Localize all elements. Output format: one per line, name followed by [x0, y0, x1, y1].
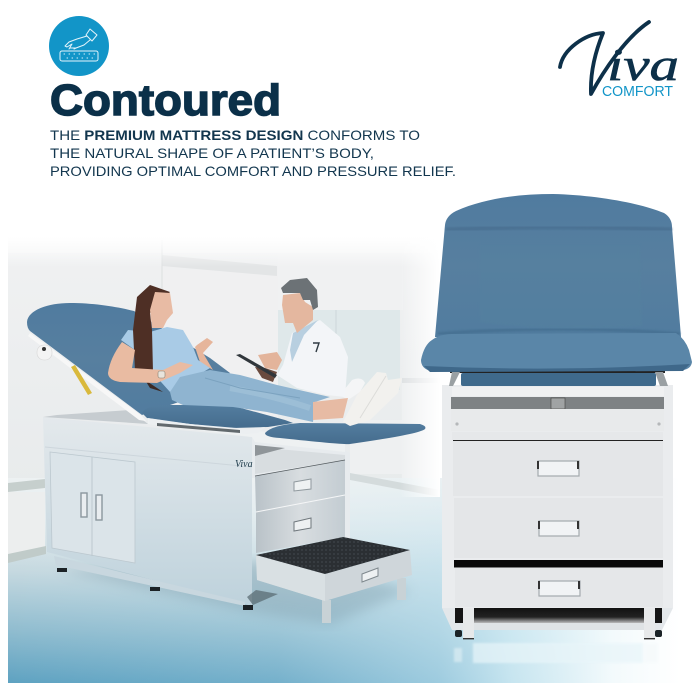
panel: clinic room photo: [8, 237, 680, 683]
logo: Viva Comfort: COMFORT: [602, 84, 673, 100]
drawer 1: [453, 441, 663, 496]
socks and shoes: [343, 372, 402, 426]
cabinet front: [43, 417, 252, 606]
logo: Viva Comfort: iva: [607, 39, 679, 90]
foot pad: [265, 423, 425, 444]
text block: description: THE PREMIUM MATTRESS DESIGN CONFORMS TO: [50, 127, 420, 143]
backrest: [435, 194, 681, 337]
floor shadow: [58, 560, 412, 625]
logo: Viva Comfort: [560, 22, 679, 100]
chair behind doctor: [340, 379, 365, 400]
cabinet base and feet: [54, 556, 245, 606]
table frame: [148, 418, 345, 452]
paper roll and lever: [37, 345, 92, 395]
legs and base: [455, 608, 662, 639]
panel: left exam table with patient and doctor: [27, 278, 425, 625]
seat pad: [142, 405, 293, 428]
seat frame: [148, 418, 265, 434]
backrest frame strip: [28, 333, 146, 421]
cabinet doors: [50, 452, 135, 563]
right column: [252, 437, 350, 540]
hair: [133, 285, 170, 372]
drawer 3: [454, 560, 663, 607]
panel: right exam table front view: [421, 194, 692, 663]
reflection: [454, 643, 658, 663]
drawers: [255, 460, 345, 553]
text block: description: PROVIDING OPTIMAL COMFORT AND PRESSURE RELIEF.: [50, 163, 456, 179]
face: [150, 292, 173, 328]
upper panels: [452, 387, 664, 396]
text block: description: THE NATURAL SHAPE OF A PATIENT’S BODY,: [50, 145, 374, 161]
cabinet body: [442, 385, 673, 608]
shirt: [121, 327, 210, 392]
drawer 2: [454, 498, 663, 558]
patient: [108, 285, 402, 426]
text block: description: [50, 127, 456, 179]
under-seat tray: [461, 373, 656, 386]
pull-out step: [247, 537, 412, 623]
near arm and hand: [108, 342, 193, 383]
doctor: [236, 278, 348, 397]
icon: hand pressing mattress: [49, 16, 109, 76]
seat cushion: [421, 333, 692, 372]
tiny brand mark: Viva: [235, 459, 253, 470]
lower leg: [313, 398, 348, 420]
backrest: [27, 303, 230, 415]
jeans: [170, 370, 330, 422]
floor: [8, 478, 680, 683]
heading: Contoured: [50, 76, 281, 125]
far arm: [195, 338, 213, 370]
